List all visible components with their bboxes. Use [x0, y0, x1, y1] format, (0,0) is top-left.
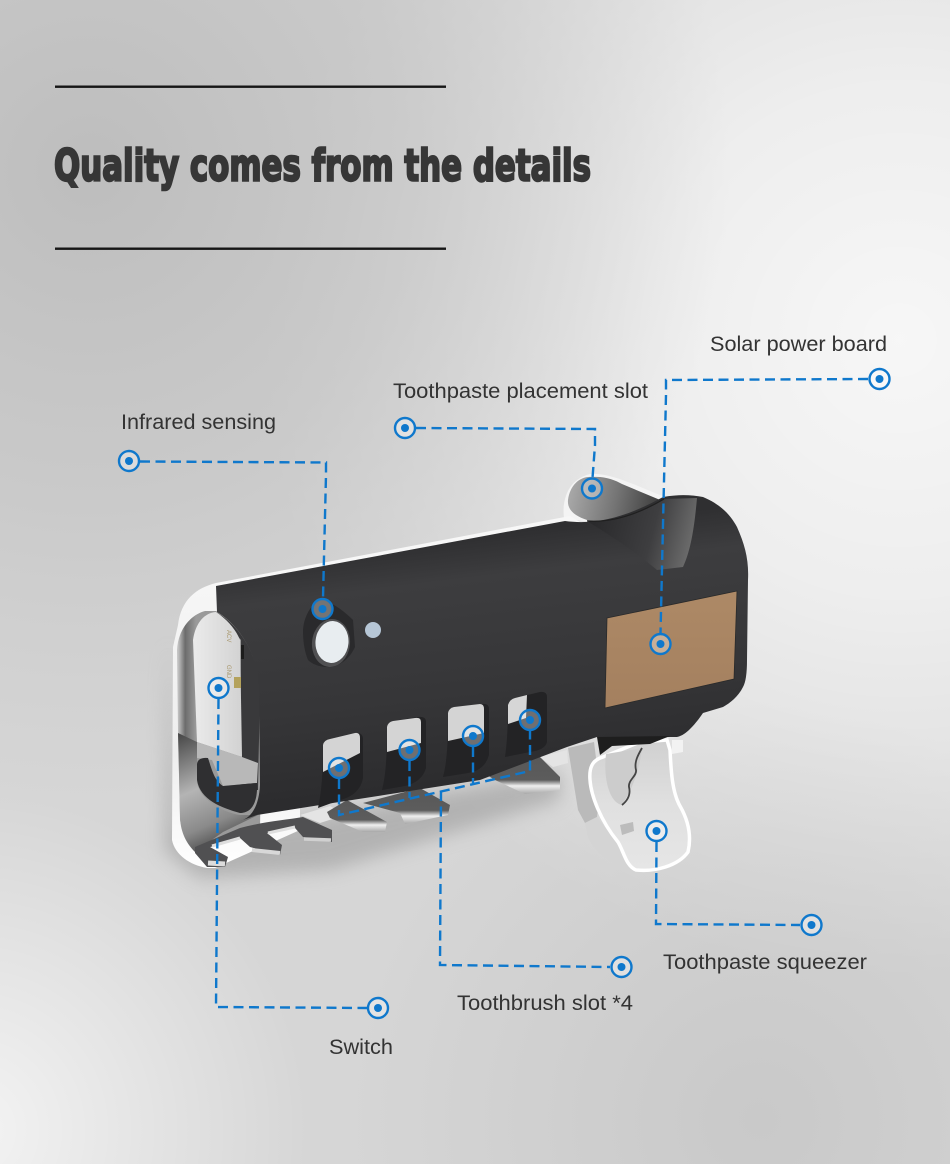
callout: solar power board: Solar power board	[710, 332, 887, 356]
lower silver bracket	[178, 733, 258, 852]
callout: switch	[208, 678, 393, 1059]
cast shadow	[165, 640, 560, 878]
light ledge under board	[197, 742, 258, 786]
title: Quality comes from the details	[54, 140, 591, 192]
callout: toothbrush slot: Toothbrush slot *4	[457, 991, 633, 1015]
underside dark trim	[597, 736, 670, 755]
housing	[216, 495, 748, 821]
callout: toothbrush slot	[329, 710, 633, 1015]
scoop curl edge	[587, 499, 664, 521]
product: toothbrush holder	[165, 474, 748, 878]
infrared sensor	[303, 600, 355, 669]
toothpaste scoop	[568, 477, 665, 540]
callout: solar power board	[650, 332, 890, 654]
compartment hook	[197, 758, 257, 813]
scoop halo	[564, 474, 668, 522]
circuit board with connector	[193, 612, 244, 757]
callout: toothpaste squeezer	[646, 821, 867, 974]
wall plate	[172, 583, 300, 868]
callout: toothpaste placement slot	[393, 379, 648, 498]
squeezer	[568, 740, 690, 870]
circuit board with connector: GND	[225, 665, 231, 679]
callout: infrared sensing	[119, 410, 332, 619]
brush slots	[318, 692, 547, 808]
solar panel	[605, 591, 737, 708]
circuit board with connector: ACV	[225, 630, 231, 642]
callout: switch: Switch	[329, 1035, 393, 1059]
white top edge	[216, 516, 580, 590]
comb prongs	[195, 750, 568, 867]
recess inner dark strip	[216, 612, 260, 790]
callout: toothpaste squeezer: Toothpaste squeezer	[663, 950, 867, 974]
callout: toothpaste placement slot: Toothpaste placement slot	[393, 379, 648, 403]
indicator light	[365, 622, 381, 638]
plate recess	[177, 611, 262, 852]
scoop groove	[587, 498, 697, 570]
callout: infrared sensing: Infrared sensing	[121, 410, 276, 434]
